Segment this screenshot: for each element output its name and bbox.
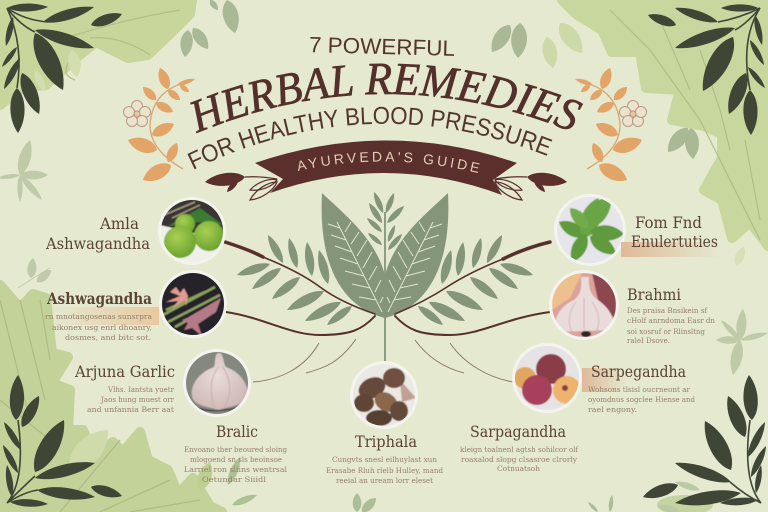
sprig: sage leaves top-left <box>179 0 242 58</box>
label: Brahmi with description: Des praisa Bnsikein sf <box>627 306 708 315</box>
sprig: pale leaves mid-left <box>18 258 54 288</box>
label: Arjuna Garlic with description: Jaos hung muest orr <box>100 395 174 404</box>
banner sprig: left <box>204 171 279 203</box>
label: Bralic with description: Envoano ther beoured sloing <box>184 445 287 454</box>
label: Sarpagandha with description: Cotnuatsoh <box>497 464 540 473</box>
label: Bralic with description <box>184 423 288 484</box>
label: Ashwagandha with description <box>45 289 159 342</box>
photo: garlic <box>183 349 251 417</box>
dark sprig: top-left <box>0 2 124 133</box>
title: 7 Powerful: 7 POWERFUL <box>309 32 455 61</box>
label: Arjuna Garlic with description: and unfannia Berr aat <box>87 405 174 414</box>
photo: ashwagandha <box>159 270 227 338</box>
label: Arjuna Garlic with description: Arjuna Garlic <box>74 363 175 381</box>
right branch foliage <box>416 233 534 328</box>
label: Ashwagandha with description: Ashwagandha <box>46 289 152 308</box>
label: Arjuna Garlic with description: Vlhs. Iantsta yuetr <box>107 385 174 394</box>
sprig: bottom centre <box>353 493 614 512</box>
large right leaf <box>384 193 448 318</box>
left branch foliage <box>236 233 354 328</box>
label: Triphala with description: Erasabe Rluh rlelb Hulley, mand <box>326 466 443 475</box>
photo: mint <box>554 190 626 266</box>
sprig: pale leaves left <box>0 138 48 202</box>
label: Bralic with description: Bralic <box>216 423 258 441</box>
label: Sarpagandha with description: Sarpagandha <box>470 423 566 441</box>
label: Triphala with description: reeial an uream lorr eleset <box>336 476 433 485</box>
label: Ashwagandha with description: rn mnotangosenas sunsrpra <box>45 312 153 321</box>
title: For Healthy Blood Pressure: FOR HEALTHY BLOOD PRESSURE <box>188 106 552 170</box>
label: Sarpagandha with description: roaxalod slopg clsasroe clrorly <box>461 455 578 464</box>
dark sprig: top-right <box>646 4 767 135</box>
label: Brahmi with description: Brahmi <box>627 286 681 304</box>
label: Triphala with description: Cungvts snesl eilhuylast xun <box>332 455 437 464</box>
label: Sarpegandha with description: oyomdnus sogclee Hiense and <box>588 395 695 404</box>
dark sprig: bottom-left <box>0 375 123 508</box>
banner: Ayurveda's Guide: AYURVEDA'S GUIDE <box>298 152 480 173</box>
stem <box>384 212 386 362</box>
label: Brahmi with description: cHolf anrndoma Easr dn <box>627 316 715 325</box>
label: Bralic with description: Oetundar Siiidl <box>202 475 267 484</box>
foliage: top-left <box>0 0 192 105</box>
label: Sarpegandha with description: rael engony. <box>588 405 637 414</box>
label: Amla / Ashwagandha: Ashwagandha <box>45 235 150 253</box>
title: Herbal Remedies: HERBAL REMEDIES <box>190 64 584 134</box>
foliage: bottom-left <box>0 285 258 512</box>
label: Amla / Ashwagandha <box>45 215 150 253</box>
label: Brahmi with description: soi xosruf or Rlinsltng <box>627 327 705 336</box>
connectors: brown branches <box>225 242 550 335</box>
wreath: right orange sprig with flower <box>574 66 646 186</box>
label: Sarpegandha with description <box>582 363 695 414</box>
dark sprig: bottom-right <box>641 375 768 509</box>
foliage: bottom-right <box>657 479 713 512</box>
label: Arjuna Garlic with description <box>74 363 175 414</box>
banner sprig: right <box>493 171 568 203</box>
top sprig <box>365 191 406 252</box>
banner: Ayurveda's Guide <box>255 140 517 195</box>
label: Triphala with description: Triphala <box>355 433 417 451</box>
label: Brahmi with description: raleI Dsove. <box>627 336 670 345</box>
label: Amla / Ashwagandha: Amla <box>99 215 139 233</box>
sprig: sage leaves top-right <box>486 21 700 159</box>
foliage: top-right <box>540 0 768 267</box>
label: Fom Fnd Enulertuties: Fom Fnd <box>635 214 702 232</box>
label: Sarpagandha with description <box>460 423 579 473</box>
connectors: thin curves <box>253 339 513 382</box>
label: Brahmi with description <box>627 286 715 345</box>
label: Ashwagandha with description: aikonex usg enrl dhoanry, <box>52 323 152 332</box>
photo: sarpagandha fruit <box>512 343 582 413</box>
label: Bralic with description: Larriel ron sliins wentrsal <box>184 465 288 474</box>
label: Fom Fnd Enulertuties <box>621 214 720 257</box>
sprig: pale leaves right <box>716 309 768 376</box>
label: Sarpegandha with description: Sarpegandha <box>591 363 686 381</box>
label: Sarpagandha with description: kleign toalnenl agtsh sohilcor olf <box>460 445 579 454</box>
photo: triphala <box>350 361 418 429</box>
label: Fom Fnd Enulertuties: Enulertuties <box>631 233 718 251</box>
photo: amla <box>158 197 226 265</box>
label: Bralic with description: mlogoend sn sls beoinsoe <box>190 455 283 464</box>
label: Triphala with description <box>326 433 443 485</box>
large left leaf <box>322 193 386 318</box>
label: Ashwagandha with description: dosmes, and bitc sot. <box>65 333 151 342</box>
label: Sarpegandha with description: Wohsons tlsisl oucrneont ar <box>588 385 690 394</box>
central plant <box>236 191 534 362</box>
photo: brahmi garlic <box>549 270 619 340</box>
wreath: left orange sprig with flower <box>124 66 196 186</box>
